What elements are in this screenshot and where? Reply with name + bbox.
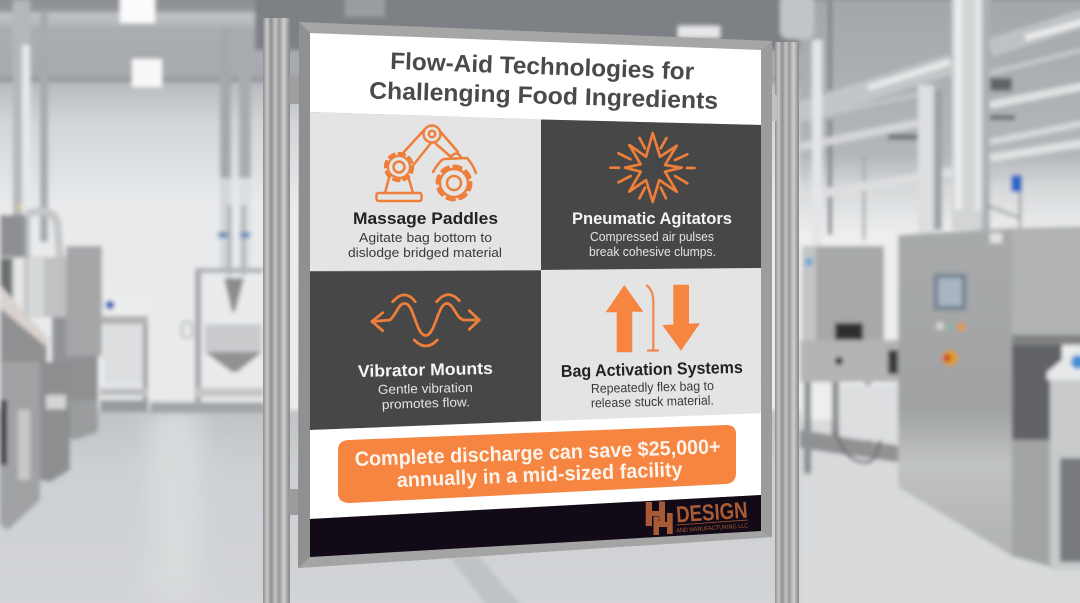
text: bag activation systems: [561, 358, 743, 410]
text: pneumatic agitators: Pneumatic Agitators: [572, 209, 732, 228]
text: bag activation systems: release stuck material.: [591, 392, 714, 410]
right support post: [775, 42, 799, 603]
text: massage paddles: [348, 209, 502, 260]
heading: title: Flow-Aid Technologies for: [390, 48, 695, 86]
panel: vibrator mounts: [310, 270, 541, 430]
panel: header: [310, 33, 761, 125]
text: massage paddles: Agitate bag bottom to: [359, 230, 492, 245]
logo: H&H Design and Manufacturing: &: [657, 516, 662, 523]
icon: vibration wave: [372, 295, 479, 346]
text: pneumatic agitators: break cohesive clumps.: [589, 244, 716, 259]
text: vibrator mounts: Gentle vibration: [378, 380, 473, 397]
text: vibrator mounts: [358, 359, 493, 412]
right wall and ducts: [799, 0, 1080, 410]
left equipment: [0, 215, 25, 257]
text: bag activation systems: Bag Activation Systems: [561, 358, 743, 381]
logo: H&H Design and Manufacturing: AND MANUFACTURING LLC: [676, 522, 749, 534]
text: pneumatic agitators: [572, 209, 732, 259]
left hopper stand: [195, 270, 201, 412]
icon: robot arm with gears: [376, 126, 476, 201]
icon: starburst: [610, 133, 694, 202]
right machine behind: [802, 246, 884, 348]
text: pneumatic agitators: Compressed air pulses: [590, 229, 714, 244]
panel: bag activation systems: [541, 268, 761, 421]
right table: [1047, 345, 1080, 380]
logo: H&H Design and Manufacturing: [646, 497, 749, 535]
text: massage paddles: Massage Paddles: [353, 209, 498, 228]
panel: savings band: [310, 413, 761, 519]
callout: savings button: Complete discharge can save $25,000+: [354, 435, 721, 471]
callout: savings button: [338, 425, 736, 503]
heading: title: [369, 48, 718, 115]
icon: up and down arrows with flexing bag: [606, 285, 700, 352]
callout: savings button: annually in a mid-sized facility: [396, 458, 684, 492]
right large cabinet: [898, 228, 1012, 556]
text: vibrator mounts: Vibrator Mounts: [358, 359, 493, 381]
sign frame: [298, 22, 772, 568]
panel: pneumatic agitators: [541, 120, 761, 270]
left post lower bracket: [289, 489, 299, 515]
text: bag activation systems: Repeatedly flex bag to: [591, 378, 714, 396]
text: vibrator mounts: promotes flow.: [382, 394, 470, 412]
text: massage paddles: dislodge bridged material: [348, 245, 502, 260]
ceiling lights: [120, 0, 155, 23]
right pillars: [812, 40, 822, 245]
right post bracket: [771, 95, 777, 121]
panel: massage paddles: [310, 112, 541, 271]
heading: title: Challenging Food Ingredients: [369, 78, 718, 115]
sign panel: [310, 33, 761, 557]
blue sensor: [1011, 175, 1022, 192]
left pillars: [13, 0, 30, 260]
floor: [0, 410, 1080, 603]
left support post: [263, 18, 290, 603]
dark ceiling behind the sign: [255, 0, 805, 50]
left post upper bracket: [289, 78, 299, 104]
logo: H&H Design and Manufacturing: DESIGN: [675, 497, 748, 527]
panel: footer band: [310, 495, 761, 557]
